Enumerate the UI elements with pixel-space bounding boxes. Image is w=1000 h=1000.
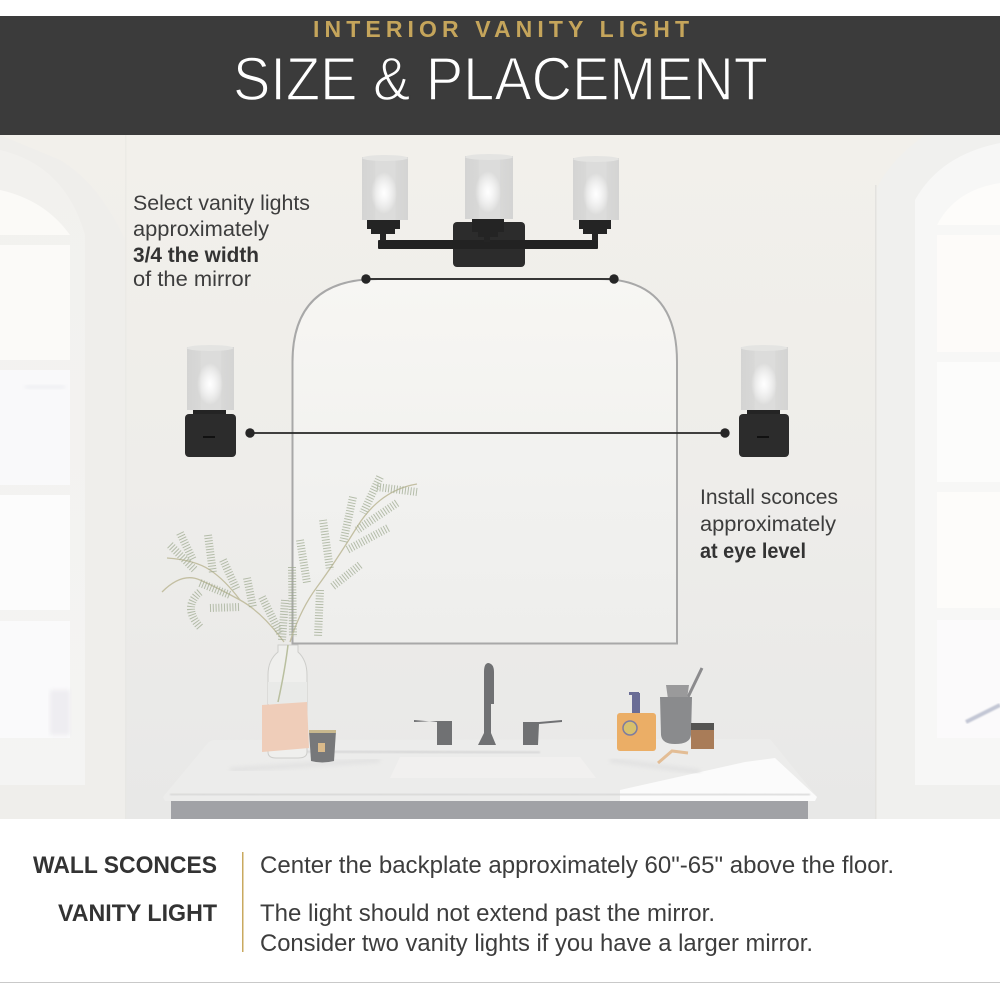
arm [378,240,598,249]
bottom panel [0,819,1000,983]
wall sconces label: WALL SCONCES [33,852,217,879]
callout: sconce height [700,486,838,563]
vanity light label: VANITY LIGHT [58,900,217,927]
callout: vanity light width: 3/4 the width [133,244,259,267]
soap bottle [617,692,656,751]
sockets [367,219,611,242]
callout: vanity light width [133,192,310,291]
cup and toothbrush [660,668,702,744]
callout: sconce height: Install sconces [700,486,838,509]
title: SIZE & PLACEMENT [233,45,768,113]
eyebrow heading: INTERIOR VANITY LIGHT [313,16,689,42]
vanity light fixture [362,154,619,267]
jar [691,723,714,749]
wall sconces instruction: Center the backplate approximately 60"-65" above the floor. [260,852,894,879]
glass shades [362,154,619,220]
gold divider [242,852,244,952]
right wall sconce [739,345,789,457]
header banner [0,16,1000,135]
right window [875,135,1000,819]
callout: sconce height: at eye level [700,540,806,563]
left wall sconce [185,345,236,457]
candle [309,730,336,762]
faucet [414,663,562,745]
vanity light instructions: The light should not extend past the mirror. [260,900,715,927]
plant fronds [162,477,417,702]
countertop [163,739,817,819]
mirror [292,279,677,644]
vase label [262,702,309,752]
width measurement line [361,274,619,284]
razor [658,751,688,763]
backplate [453,222,525,267]
callout: vanity light width: of the mirror [133,268,251,291]
callout: vanity light width: approximately [133,218,270,241]
sconce spacing line [245,428,730,438]
left window [0,135,126,819]
bathroom scene background [0,135,1000,819]
vanity light instructions [260,900,813,957]
callout: sconce height: approximately [700,513,837,536]
vanity light instructions: Consider two vanity lights if you have a larger mirror. [260,930,813,957]
plant vase [262,645,309,758]
vanity cabinet [171,801,808,819]
callout: vanity light width: Select vanity lights [133,192,310,215]
